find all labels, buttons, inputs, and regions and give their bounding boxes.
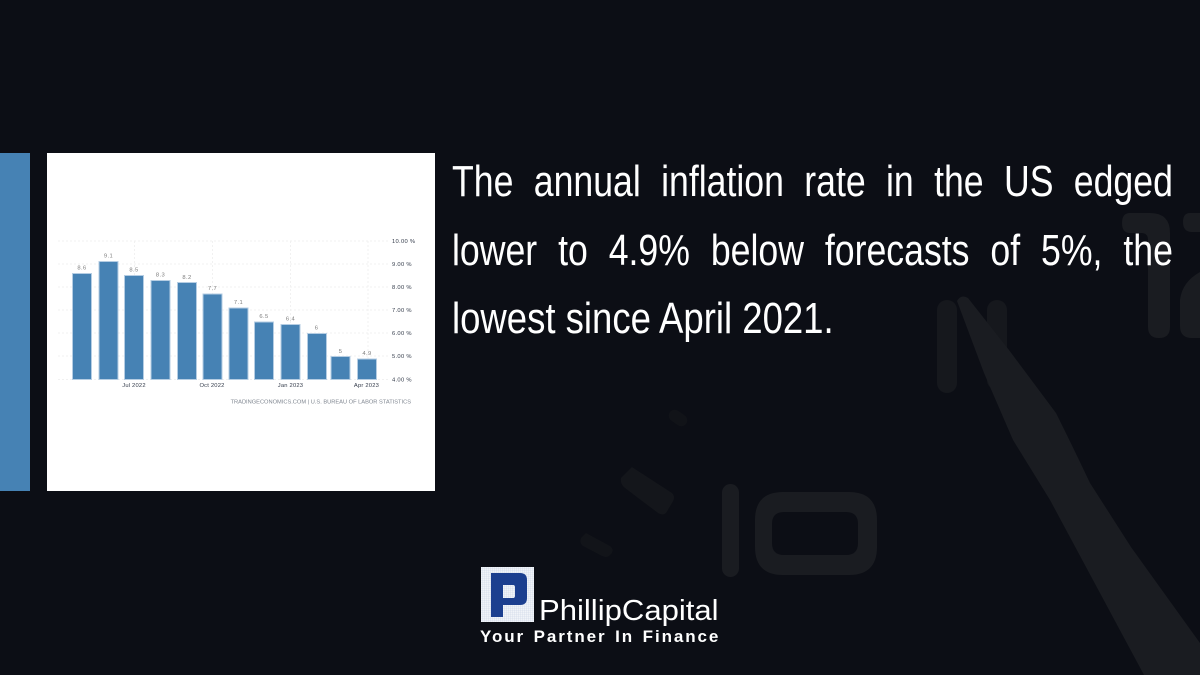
bar chart: annual inflation rate: 8.00 % [392,285,412,291]
bar chart: annual inflation rate: 8.6 [77,266,87,272]
bar chart: annual inflation rate: 9.1 [104,254,113,260]
bar chart: annual inflation rate: 7.1 [234,300,243,306]
bar chart: annual inflation rate: 7.00 % [392,308,412,314]
bar chart: annual inflation rate: 10.00 % [392,239,415,245]
headline text [452,157,1173,343]
bar chart: annual inflation rate: 7.7 [208,286,217,292]
headline text: lower to 4.9% below forecasts of 5%, the [452,226,1173,275]
accent bar [0,153,30,491]
icon: P mark [481,567,534,622]
bar chart: annual inflation rate: 9.00 % [392,262,412,268]
bar chart: annual inflation rate: Apr 2023 [354,383,379,389]
bar chart: annual inflation rate: 8.5 [129,268,139,274]
bar chart: annual inflation rate: 4.00 % [392,378,412,384]
tagline: Your Partner In Finance [480,627,720,646]
bar chart: annual inflation rate: 4.9 [362,351,372,357]
bar chart: annual inflation rate: 6.5 [259,314,269,320]
headline text: lowest since April 2021. [452,294,834,343]
bar chart: annual inflation rate: Jul 2022 [122,383,146,389]
bar chart: annual inflation rate: 8.3 [156,272,165,278]
bar chart: annual inflation rate: Oct 2022 [199,383,225,389]
logo: PhillipCapital [480,567,720,646]
chart source: TRADINGECONOMICS.COM | U.S. BUREAU OF LABOR STATISTICS [231,400,411,406]
bar chart: annual inflation rate: 8.2 [182,275,192,281]
bar chart: annual inflation rate: 5 [339,349,342,355]
bar chart: annual inflation rate: 6 [315,326,318,332]
company name: PhillipCapital [539,595,719,627]
bar chart: annual inflation rate: 5.00 % [392,354,412,360]
panel: inflation chart [47,153,435,491]
bar chart: annual inflation rate: 6.4 [286,316,296,322]
bar chart: annual inflation rate: Jan 2023 [278,383,303,389]
bar chart: annual inflation rate: 6.00 % [392,331,412,337]
bar chart: annual inflation rate [58,239,415,406]
headline text: The annual inflation rate in the US edged [452,157,1173,206]
